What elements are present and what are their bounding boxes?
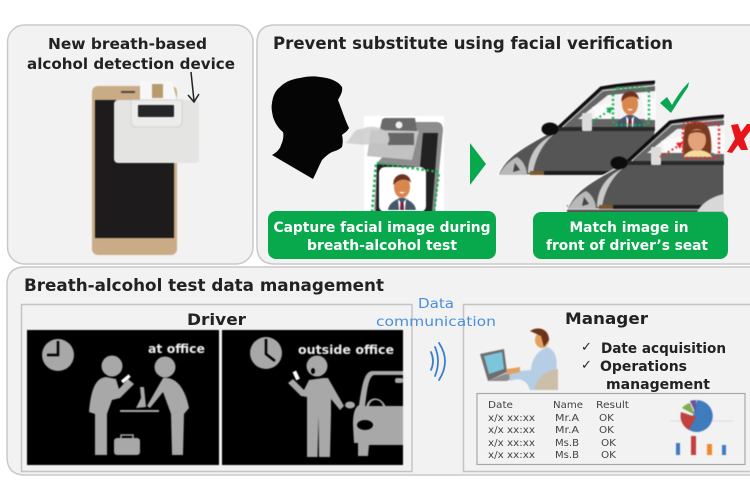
heading: driver: Driver xyxy=(187,310,246,329)
table: test results: x/x xx:xx xyxy=(488,425,535,436)
table: test results: Mr.A xyxy=(555,425,579,436)
table: test results: Ms.B xyxy=(555,438,579,449)
icon: wireless waves xyxy=(431,343,445,380)
table: test results: OK xyxy=(599,413,614,424)
arrow: green triangle xyxy=(470,143,486,185)
list: manager tasks: management xyxy=(606,377,710,393)
table: test results: x/x xx:xx xyxy=(488,450,535,461)
table: test results: Date xyxy=(488,400,513,411)
table: test results: Ms.B xyxy=(555,450,579,461)
icon: person testing xyxy=(89,356,134,455)
panel: data management xyxy=(7,267,750,475)
table: test results: Name xyxy=(553,400,583,411)
text: at office: at office xyxy=(148,342,205,356)
panel: manager xyxy=(464,304,750,472)
icon: manager at laptop xyxy=(480,328,558,390)
list: manager tasks xyxy=(581,340,726,393)
table: test results: Result xyxy=(596,400,629,411)
chart: bars xyxy=(676,436,726,455)
icon: briefcase xyxy=(114,435,140,455)
icon: smartphone with attached device xyxy=(92,81,199,255)
icon: phone with device and portrait xyxy=(345,116,444,212)
list: manager tasks: Operations xyxy=(600,359,687,375)
icon: clock xyxy=(42,339,74,371)
table: test results: OK xyxy=(601,438,616,449)
table: test results: Mr.A xyxy=(555,413,579,424)
text: data communication: communication xyxy=(376,314,496,330)
icon: green check mark xyxy=(660,82,689,113)
icon: woman driver xyxy=(683,122,712,157)
label: capture facial image: breath-alcohol test xyxy=(307,238,457,254)
icon: office staff xyxy=(147,356,189,455)
panel: results table xyxy=(477,394,745,464)
list: manager tasks: Date acquisition xyxy=(601,341,726,357)
icon: head silhouette xyxy=(272,76,349,179)
heading: manager: Manager xyxy=(565,309,648,328)
heading: data management: Breath-alcohol test data management xyxy=(24,276,384,295)
label: match image: Match image in xyxy=(570,220,688,236)
image: breath cloud xyxy=(345,127,390,145)
label: capture facial image xyxy=(268,211,496,259)
scene: at office xyxy=(27,330,219,465)
heading: device: alcohol detection device xyxy=(27,55,235,73)
table: test results: OK xyxy=(601,450,616,461)
icon: red cross xyxy=(727,124,750,153)
heading: device: New breath-based xyxy=(48,35,207,53)
label: capture facial image: Capture facial image during xyxy=(274,220,490,236)
icon: car xyxy=(353,371,403,456)
list: manager tasks: ✓ xyxy=(581,358,592,373)
scene: outside office xyxy=(222,330,403,465)
label: match image xyxy=(533,212,728,259)
list: manager tasks: ✓ xyxy=(581,340,592,355)
label: match image: front of driver’s seat xyxy=(546,238,708,254)
icon: person with phone xyxy=(288,356,355,457)
panel: prevent substitute xyxy=(257,25,750,264)
table: test results: x/x xx:xx xyxy=(488,438,535,449)
table: test results: OK xyxy=(599,425,614,436)
image: car with matched driver xyxy=(498,82,655,175)
text: data communication: Data xyxy=(418,296,454,312)
image: car with mismatched driver xyxy=(567,116,724,213)
icon: desk and terminal xyxy=(120,387,159,412)
heading: facial verification: Prevent substitute using facial verification xyxy=(273,34,673,53)
arrow: points to device xyxy=(188,72,199,102)
icon: clock xyxy=(250,337,282,369)
panel: breath-based device xyxy=(8,25,253,264)
chart: pie xyxy=(670,400,733,432)
table: test results: x/x xx:xx xyxy=(488,413,535,424)
panel: driver xyxy=(22,304,412,472)
text: outside office: outside office xyxy=(298,343,394,357)
